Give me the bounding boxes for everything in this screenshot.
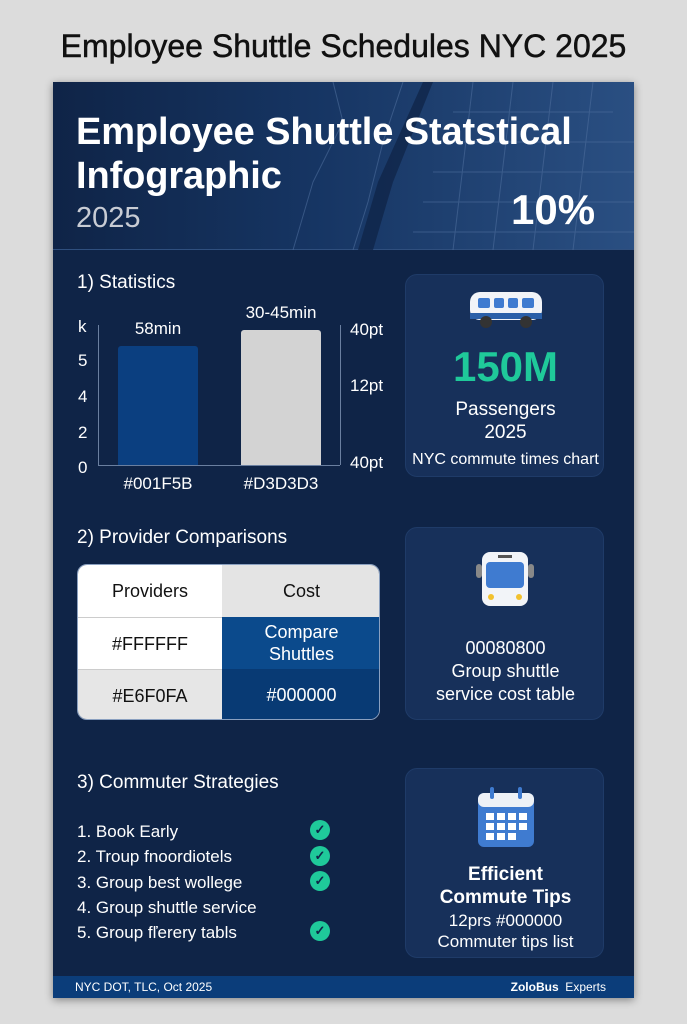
strategies list: 1. Book Early <box>77 822 178 841</box>
header title <box>76 111 572 197</box>
main infographic card: #D3D3D3 <box>244 474 318 493</box>
main infographic card: #001F5B <box>124 474 192 493</box>
icons: check marks: ✓ <box>315 848 325 863</box>
icons: check marks <box>310 820 330 941</box>
header with map background <box>53 82 634 250</box>
header year: 2025 <box>76 202 141 234</box>
strategies list: 5. Group fľerery tabls <box>77 923 237 942</box>
panel: cost table: service cost table <box>436 684 575 704</box>
panel: passengers stat: 2025 <box>484 422 527 443</box>
panel: cost table: 00080800 <box>465 638 546 658</box>
strategies list: 3. Group best wollege <box>77 873 242 892</box>
provider table: Shuttles <box>269 644 334 664</box>
section 2 heading: 2) Provider Comparisons <box>77 527 287 548</box>
icons: check marks: ✓ <box>315 822 325 837</box>
provider table: Cost <box>283 581 320 601</box>
panel: cost table: Group shuttle <box>451 661 560 681</box>
provider table: Providers <box>112 581 188 601</box>
bar chart <box>78 303 383 493</box>
icons: check marks: ✓ <box>315 873 325 888</box>
panel: passengers stat: Passengers <box>455 399 556 420</box>
provider table: #000000 <box>266 685 337 705</box>
page title: Employee Shuttle Schedules NYC 2025 <box>61 28 626 64</box>
provider table <box>77 564 380 720</box>
icon: bus front <box>476 552 534 606</box>
map decoration <box>292 82 634 250</box>
bar chart: 2 <box>78 423 87 442</box>
bar chart: 40pt <box>350 453 383 472</box>
panel: commute tips: 12prs #000000 <box>449 911 562 930</box>
icons: check marks: ✓ <box>315 923 325 938</box>
strategies list <box>77 822 257 942</box>
bar chart: 5 <box>78 351 87 370</box>
main infographic card <box>53 82 634 998</box>
provider table: #E6F0FA <box>112 686 188 706</box>
icon: calendar <box>478 787 534 847</box>
footer bar: ZoloBus Experts <box>511 980 606 994</box>
bar chart: k <box>78 317 86 336</box>
provider table: Compare <box>264 622 339 642</box>
strategies list: 4. Group shuttle service <box>77 898 257 917</box>
panel: commute tips: Commuter tips list <box>437 932 574 951</box>
panel: commute tips: Efficient <box>468 864 543 885</box>
panel: commute tips <box>405 768 604 958</box>
panel: cost table <box>405 527 604 720</box>
icon: shuttle bus <box>470 292 542 328</box>
bar chart: 40pt <box>350 320 383 339</box>
bar 2 <box>241 330 321 465</box>
bar chart: 58min <box>135 319 181 338</box>
bar chart: 12pt <box>350 376 383 395</box>
header title: Infographic <box>76 155 282 197</box>
bar 1 <box>118 346 198 465</box>
panel: passengers stat: NYC commute times chart <box>412 451 599 468</box>
bar chart: 30-45min <box>246 303 316 322</box>
panel: passengers stat: 150M <box>453 343 558 390</box>
section 3 heading: 3) Commuter Strategies <box>77 772 279 793</box>
section 1 heading: 1) Statistics <box>77 272 175 293</box>
panel: commute tips: Commute Tips <box>440 887 571 908</box>
bar chart: 4 <box>78 387 87 406</box>
header percent: 10% <box>511 186 595 233</box>
bar chart: 0 <box>78 458 87 477</box>
header title: Employee Shuttle Statstical <box>76 111 572 153</box>
strategies list: 2. Troup fnoordiotels <box>77 847 232 866</box>
footer bar: NYC DOT, TLC, Oct 2025 <box>75 980 212 994</box>
footer bar <box>53 976 634 998</box>
panel: passengers stat <box>405 274 604 477</box>
provider table: #FFFFFF <box>112 634 188 654</box>
